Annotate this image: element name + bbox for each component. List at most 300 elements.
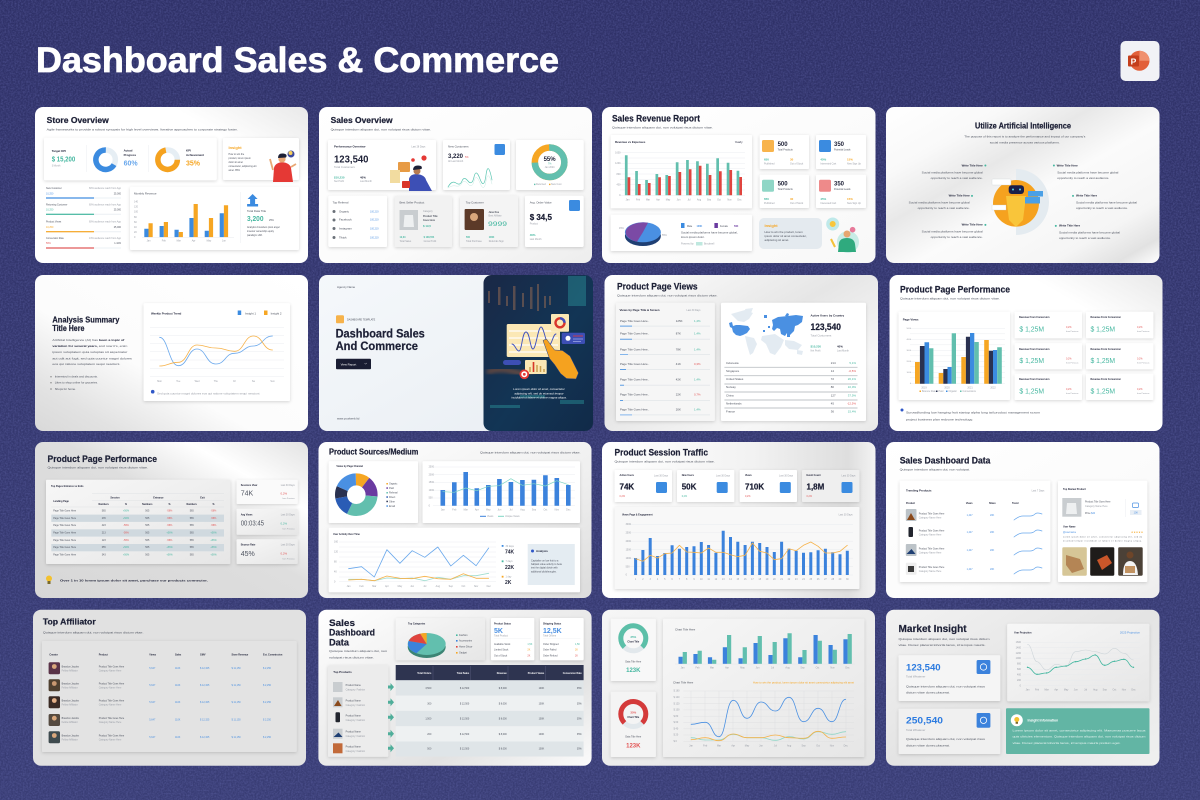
body text: aut odit aut fugit, sed quia cuuntur magni dolores: [52, 356, 133, 360]
performance overview panel: 40%: [360, 176, 366, 180]
KPI panel: KPI: [186, 149, 191, 153]
table: sales by product: $ 12,500: [460, 687, 470, 690]
best seller panel: $ 19,5: [423, 224, 431, 228]
performance overview panel: [328, 140, 436, 191]
bar chart: Jan: [681, 666, 685, 670]
panel: top review product: Category Name Here: [1085, 505, 1108, 508]
KPI tile: new users: New Users: [682, 474, 695, 477]
table: views by page title: 87K: [676, 332, 681, 336]
country table: 26,1%: [848, 377, 856, 381]
line chart: year projection: Feb: [1035, 688, 1040, 692]
KPI tile: event count: 1,8M: [806, 482, 825, 491]
stat card: 123,540: 123,540: [906, 663, 941, 674]
table: trending products: 1,447: [967, 514, 973, 517]
KPI panel: [44, 138, 217, 180]
table: creators: Category Name Here: [99, 686, 122, 689]
best seller panel: Gross Profit: [424, 240, 437, 243]
agency name: Agency Name: [337, 285, 356, 289]
monthly revenue chart panel: Feb: [162, 240, 167, 242]
table: creators: $ 11,150: [232, 667, 241, 670]
button: view report: View Report: [341, 362, 356, 366]
table: top pages: 565: [145, 510, 150, 512]
heading: Top Affiliator: [43, 617, 96, 626]
callout: right block 1: [1053, 163, 1119, 180]
table: top pages: Page Title Goes Here: [53, 532, 77, 534]
panel: top review product: @username: [1063, 531, 1077, 534]
bar and line chart: views page and engagement: 10: [700, 578, 703, 581]
panel: top review product: eiusmod tempor incididunt ut labore et dolore magna aliqua.: [1063, 540, 1142, 543]
table: top pages: -56%: [211, 510, 217, 512]
country table: Indonesia: [726, 361, 739, 365]
table: top pages: -56%: [123, 539, 130, 542]
panel: Utilize Artificial Intelligence slide: [886, 107, 1160, 263]
best seller panel: Category: [423, 210, 434, 213]
table: trending products: Category Name Here: [919, 534, 942, 536]
bar chart: Jun: [756, 666, 760, 670]
table: top pages: +56%: [123, 546, 130, 549]
monthly revenue chart panel: investor ownership equity: [247, 230, 275, 233]
bar chart: page views: 5000: [907, 328, 912, 330]
table: top pages: +56%: [210, 554, 217, 556]
gauge panel: teal: 123K: [626, 668, 641, 674]
subtitle: Quisque interdum aliquam dui, non volutpat.: [900, 467, 970, 471]
stat card: total products teal: Published: [764, 202, 775, 205]
illustration: man with laptop: [390, 155, 432, 191]
heading: Market Insight: [898, 623, 967, 635]
line chart: Chart Title Here: [673, 680, 694, 684]
table: creators: Fellow Affiliator: [62, 686, 78, 689]
KPI tile: active users: 74K: [620, 482, 634, 491]
callout: left block 3: Social media platforms have become global: [922, 230, 983, 234]
bar chart: revenue vs expenses: Sep: [707, 198, 712, 202]
monthly revenue chart panel: [130, 187, 299, 250]
heading: Analysis Summary: [52, 316, 120, 325]
stat card: 250,540: dictum vitae donec placerat.: [906, 743, 950, 747]
table: views by page title: Views by Page Title & Screen: [620, 308, 660, 312]
top products panel: Category: Fashion: [346, 688, 366, 692]
stat card: potential leads: [816, 135, 866, 169]
line chart: user activity over time: Aug: [436, 585, 441, 588]
table: top pages: +56%: [166, 532, 173, 534]
revenue tile 5: $ 1,25M: [1019, 388, 1044, 395]
map panel: active users by country: Last Month: [837, 349, 849, 352]
table: views by page title: 20K: [676, 407, 681, 411]
stat card: potential leads: Interested Cart: [820, 162, 837, 166]
revenue tile 4: $ 1,25M: [1090, 358, 1115, 365]
callout: right block 3: opportunity to reach a vast audience.: [1059, 236, 1111, 240]
table: sales by product: $ 8,000: [499, 702, 507, 705]
donut chart: views by page channel: Paid: [389, 487, 394, 490]
progress metrics list: 25,000: [114, 192, 122, 196]
pie chart: top categories: [396, 618, 485, 660]
callout: left block 1: opportunity to reach a vast audience.: [931, 176, 983, 180]
table: trending products: Trending Products: [906, 488, 932, 492]
line chart: year projection: Jan: [1026, 688, 1030, 692]
KPI panel: 35%: [186, 161, 201, 168]
subtitle: The purpose of this report is to analyze the performance and impact of our company's: [964, 135, 1086, 139]
top products panel: Product Name: [346, 699, 362, 702]
customer donut panel: 7%: [548, 162, 552, 166]
avg views tile: [236, 509, 298, 535]
line chart: user activity over time: 1 day: [506, 575, 512, 578]
table: views by page title: 41K: [676, 362, 681, 366]
avg views tile: from Previous: [282, 528, 295, 530]
line chart: year projection: [1007, 624, 1150, 701]
table: sales by product: [396, 665, 584, 756]
stat card: total products: 30: [790, 158, 794, 162]
panel: Product Page Performance slide A: [890, 275, 1162, 431]
panel: chart slide: [602, 610, 875, 766]
performance overview panel: Performance Overview: [334, 145, 366, 149]
insight panel: dolor sit amet: [228, 161, 243, 164]
bar and line chart: views: 1500: [429, 481, 435, 484]
revenue tile 3: [1014, 343, 1082, 369]
new customers panel: New Customers: [448, 145, 469, 149]
bar chart: page views: 2000: [907, 361, 912, 363]
stat card: total products teal: Out of Stock: [790, 202, 804, 205]
panel: top review product: Price $20: [1085, 512, 1096, 515]
monthly revenue chart panel: May: [207, 240, 212, 242]
sessions view tile: from Previous: [282, 498, 295, 500]
bar and line chart: views: 2000: [429, 473, 435, 476]
gauge panel: teal: Chart Title: [627, 640, 640, 644]
revenue tile 6: 0,2%: [1137, 388, 1143, 391]
new customers panel: All Last Month: [448, 160, 464, 163]
KPI tile: views: [740, 470, 797, 502]
performance overview panel: Total Customers: [334, 165, 355, 169]
callout: left block 2: Write Title Here: [949, 194, 970, 198]
subtitle: Quisque interdum aliquam dui, non volutpat risus dictum vitae.: [480, 451, 581, 455]
bar chart: Oct: [816, 666, 820, 670]
map panel: active users by country: Total Customers: [810, 334, 832, 338]
bar and line chart: views page and engagement: 17: [751, 578, 754, 581]
table: top pages: 565: [190, 546, 194, 549]
country table: France: [726, 409, 735, 413]
line chart: weekly product trend: Wed: [195, 380, 200, 383]
insight panel: Insight: [228, 145, 242, 150]
product status panel: [491, 618, 534, 660]
illustration: chart card and hand: [503, 314, 585, 379]
bar and line chart: views: 2500: [429, 466, 435, 469]
top products panel: Category: Fashion: [346, 750, 366, 753]
insight panel: [223, 138, 299, 182]
bar and line chart: views page and engagement: 6: [671, 578, 673, 581]
customer donut panel: Jan 2024: [545, 166, 555, 169]
line chart: user activity over time: 2K: [505, 580, 512, 586]
line chart: year projection: 1400: [1016, 646, 1022, 649]
bar chart: Chart Title Here: [675, 627, 696, 631]
best seller panel: [395, 196, 452, 247]
revenue tile 4: 0,2%: [1137, 358, 1143, 361]
country table: United States: [726, 377, 744, 381]
monthly revenue chart panel: Jun: [222, 240, 226, 242]
bar and line chart: views: Apr: [475, 508, 479, 512]
bar chart: [675, 627, 855, 670]
gauge panel: red: Chart Title: [627, 716, 640, 719]
table: sales by product: 500: [427, 748, 432, 751]
revenue tile 2: 0,2%: [1137, 326, 1143, 329]
stat card: potential leads: 15%: [847, 158, 853, 162]
table: creators: $ 11,150: [232, 701, 241, 704]
bar and line chart: views: 0: [429, 504, 431, 507]
product status panel: Product Status: [494, 622, 512, 625]
line chart: user activity over time: [329, 528, 580, 592]
panel: Sales Revenue Report slide: [602, 107, 876, 263]
bar and line chart: views: Sep: [532, 508, 537, 512]
KPI tile: views: 710K: [745, 482, 764, 491]
table: top pages: Top Pages Entrance vs Exits: [51, 485, 84, 488]
line chart: $ 140: [674, 696, 680, 699]
bar chart: revenue vs expenses: Feb: [636, 198, 641, 202]
top products panel: Product Name: [346, 745, 362, 748]
table: creators: Fellow Affiliator: [62, 721, 78, 724]
pie chart panel: male vs female: Brockwell: [704, 242, 715, 246]
line chart: How to win the product, lorem ipsum dolor sit amet consectetur adipiscing elit amet: [753, 681, 854, 684]
table: trending products: Views: [966, 502, 973, 505]
analysis callout: ballpark value activity to beta: [531, 563, 562, 566]
progress metrics list: [46, 187, 122, 249]
table: top pages: 565: [145, 546, 150, 549]
table: sales by product: Total Orders: [417, 672, 432, 675]
table: sales by product: 35%: [577, 717, 583, 720]
progress metrics list: Product Views: [46, 221, 62, 224]
bar and line chart: views: Dec: [566, 508, 571, 512]
bar and line chart: views page and engagement: 21: [780, 578, 784, 581]
line chart: year projection: 1600: [1016, 641, 1022, 644]
line chart: year projection: 1000: [1016, 657, 1022, 660]
callout: left block 2: opportunity to reach a vast audience.: [918, 206, 970, 210]
customer donut panel: New Cust: [551, 183, 562, 186]
subtitle: Quisque interdum aliquam dui, non volutpat risus dictum vitae.: [900, 297, 1000, 301]
revenue tile 5: 0,2%: [1066, 388, 1072, 391]
country table: [724, 361, 858, 413]
donut chart: views by page channel: Referral: [389, 492, 398, 495]
stat card: potential leads red: 45%: [820, 197, 827, 201]
top referral panel: 100,219: [370, 236, 379, 239]
table: views by page title: 1,4%: [694, 378, 701, 382]
revenue tile 4: from Previous: [1137, 363, 1149, 365]
KPI tile: active users: [614, 470, 672, 502]
table: creators: $ 11,150: [232, 736, 241, 739]
line chart: $ 20: [674, 734, 679, 737]
table: creators: Category Name Here: [99, 721, 122, 724]
callout: left block 1: [922, 163, 986, 180]
table: top pages: 565: [190, 539, 194, 542]
body text: eos qui ratione voluptatem sequi nesciunt.: [52, 362, 121, 366]
progress metrics list: 1.44%: [114, 242, 122, 245]
revenue tile 4: [1086, 343, 1153, 369]
table: top pages: -56%: [211, 517, 217, 520]
table: top pages: Entrance: [153, 496, 164, 500]
progress metrics list: 25,000: [114, 226, 122, 229]
table: sales by product: Revenue: [497, 672, 507, 675]
bar and line chart: views page and engagement: 25: [809, 578, 813, 581]
table: creators: 110K: [175, 684, 181, 687]
heading: Sales Revenue Report: [612, 114, 701, 125]
subtitle: vitae. Donec placerat lobortis lacus, id tempus mauris.: [898, 643, 986, 647]
bar and line chart: views page and engagement: 2500: [626, 532, 632, 534]
line chart: user activity over time: Oct: [462, 585, 466, 588]
table: creators: Brandon Jacobs: [62, 665, 80, 668]
monthly revenue chart panel: 60: [134, 221, 137, 224]
table: views by page title: Last 30 Days: [686, 309, 701, 312]
line chart: year projection: Sep: [1103, 688, 1108, 692]
KPI tile: new users: [677, 470, 734, 502]
KPI panel: $ 15,200: [52, 157, 75, 164]
icon: template badge: [336, 315, 344, 323]
line chart: user activity over time: Sep: [449, 585, 454, 588]
insight panel: How to win the: [228, 153, 245, 156]
table: creators: Product Title Goes Here: [99, 682, 125, 685]
map panel: active users by country: $10,230: [810, 345, 821, 349]
line chart: weekly product trend: Fri: [233, 380, 236, 383]
stat card: total products: Out of Stock: [790, 162, 804, 166]
line chart: year projection: May: [1064, 688, 1069, 692]
line chart: Oct: [816, 744, 820, 748]
cover heading: [336, 327, 425, 353]
line chart: [673, 680, 854, 748]
table: creators: Product Title Goes Here: [99, 717, 125, 720]
icon: PowerPoint badge: P: [1131, 56, 1137, 66]
line chart: year projection: 1200: [1016, 652, 1022, 655]
table: views by page title: 0,7%: [694, 393, 701, 397]
bullet list: Likes to shop online for groceries.: [55, 381, 98, 385]
KPI tile: event count: 0,2%: [806, 495, 813, 498]
top customer panel: Referrals Sign: [489, 240, 505, 243]
table: creators: Store Revenue: [232, 653, 249, 656]
callout: right block 3: Social media platforms have become global: [1059, 231, 1120, 235]
stat card: potential leads red: 15%: [847, 197, 853, 201]
table: creators: $ 2,250: [263, 701, 272, 704]
gauge panel: red: Data Title Here: [625, 735, 642, 738]
line chart: $ 100: [674, 709, 680, 712]
progress metrics list: 60% audience reach from Ago: [89, 221, 122, 224]
KPI tile: views: Last 30 Days: [779, 474, 794, 478]
best seller panel: Total Sales: [400, 240, 412, 243]
bar and line chart: views page and engagement: 15: [736, 578, 740, 581]
pie chart panel: male vs female: Male: [687, 225, 693, 228]
revenue tile 2: $ 1,25M: [1090, 326, 1115, 333]
line chart: user activity over time: Nov: [474, 585, 479, 588]
line chart: Dec: [844, 744, 849, 748]
stat card: 123,540: Quisque interdum aliquam dui, non volutpat risus: [906, 685, 986, 689]
insight callout: [759, 218, 822, 249]
stat card: total products teal: [760, 175, 809, 208]
bar chart: revenue vs expenses: 800: [616, 173, 621, 176]
top referral panel: 100,219: [370, 219, 379, 222]
progress metrics list: 10,250: [46, 226, 54, 229]
stat card: potential leads: 45%: [820, 158, 827, 162]
revenue tile 5: Revenue From Conversion: [1019, 378, 1050, 381]
bar and line chart: views: 500: [429, 497, 433, 500]
table: creators: $ 12,325: [200, 736, 210, 739]
bar chart: Sep: [800, 666, 805, 670]
line chart: user activity over time: Jun: [410, 585, 415, 588]
panel: top review product: Top Review Product: [1063, 488, 1086, 491]
table: top pages: 235: [102, 517, 106, 520]
bar chart: revenue vs expenses: 1200: [615, 162, 621, 165]
bar chart: revenue vs expenses: Yearly: [735, 140, 743, 144]
progress metrics list: Conversion Rate: [46, 237, 64, 240]
bar chart: Mar: [710, 666, 714, 670]
bounce rate tile: Bounce Rate: [241, 544, 256, 546]
bar chart: page views: 0: [910, 383, 912, 385]
product status panel: Limited Stock: [494, 649, 509, 652]
line chart: $ 60: [674, 721, 679, 724]
table: creators: $ 2,250: [263, 684, 272, 687]
table: creators: Brandon Jacobs: [62, 734, 80, 737]
bar chart: page views: 3000: [907, 350, 912, 352]
table: trending products: Trend: [1012, 502, 1019, 505]
line chart: weekly product trend: Sed quia cuuntur magni dolores eos qui ratione voluptatem sequi nesciunt: [157, 392, 260, 396]
stat card: total products: Published: [764, 162, 775, 166]
bar chart: page views: Organic: [948, 390, 958, 393]
stat card: 250,540: Total Whatever: [906, 728, 925, 732]
line chart: weekly product trend: Weekly Product Trend: [151, 311, 182, 315]
line chart: year projection: 600: [1017, 668, 1022, 671]
table: top pages: Session: [110, 496, 120, 500]
tip text: Over 1 in 10 lorem ipsum dolor sit amet, purchase our products connector.: [60, 578, 208, 582]
line chart: Jan: [689, 744, 694, 748]
KPI panel: Progress: [124, 153, 137, 157]
template label: DASHBOARD TEMPLATE: [347, 318, 376, 321]
revenue tile 1: from Previous: [1066, 331, 1078, 333]
bar and line chart: views: 1000: [429, 489, 435, 492]
sessions view tile: Sessions View: [241, 484, 257, 487]
table: creators: $ 12,325: [200, 719, 210, 722]
table: top pages: [46, 480, 230, 564]
bar chart: revenue vs expenses: Jun: [677, 198, 681, 202]
table: creators: Est. Commission: [263, 653, 283, 656]
heading: Sales: [329, 618, 355, 629]
stat card: total products: Total Products: [778, 148, 794, 152]
bar chart: Nov: [830, 666, 835, 670]
pie chart panel: male vs female: 55%: [662, 234, 668, 237]
map panel: active users by country: [721, 303, 866, 421]
table: top pages: +56%: [166, 546, 173, 549]
performance overview panel: Last Month: [360, 180, 372, 183]
revenue tile 3: Revenue From Conversion: [1019, 348, 1050, 351]
KPI tile: active users: 0,2%: [620, 495, 626, 498]
bar chart: page views: [898, 312, 1010, 400]
line chart: user activity over time: 120: [334, 551, 339, 554]
bar and line chart: views page and engagement: 13: [722, 578, 725, 581]
product status panel: 2K: [527, 649, 531, 652]
line chart: $ 0: [674, 740, 677, 743]
bar and line chart: views page and engagement: 23: [795, 578, 798, 581]
stat card: potential leads: Potential Leads: [834, 148, 851, 152]
bar and line chart: views: Oct: [544, 508, 548, 512]
country table: 5,1%: [849, 361, 856, 365]
line chart: Apr: [731, 744, 735, 748]
revenue tile 1: [1014, 312, 1082, 338]
product status panel: Out of Stock: [494, 655, 508, 658]
heading: Product Session Traffic: [614, 447, 708, 458]
top customer panel: Top Customer: [466, 200, 484, 204]
pie chart panel: male vs female: 50K: [734, 225, 739, 228]
bar and line chart: views page and engagement: 8: [686, 578, 688, 581]
bounce rate tile: Last 30 Days: [281, 544, 296, 546]
map panel: active users by country: Active Users by Country: [810, 314, 844, 318]
subtitle: volutpat risus dictum vitae.: [329, 655, 374, 659]
top customer panel: 9999: [488, 222, 508, 228]
heading: Product Page Performance: [900, 285, 1010, 296]
revenue tile 6: [1086, 374, 1153, 400]
donut chart: views by page channel: Direct: [389, 496, 396, 499]
monthly revenue chart panel: 40: [134, 226, 137, 229]
line chart: user activity over time: Dec: [487, 585, 492, 588]
revenue tile 6: from Previous: [1137, 393, 1149, 395]
